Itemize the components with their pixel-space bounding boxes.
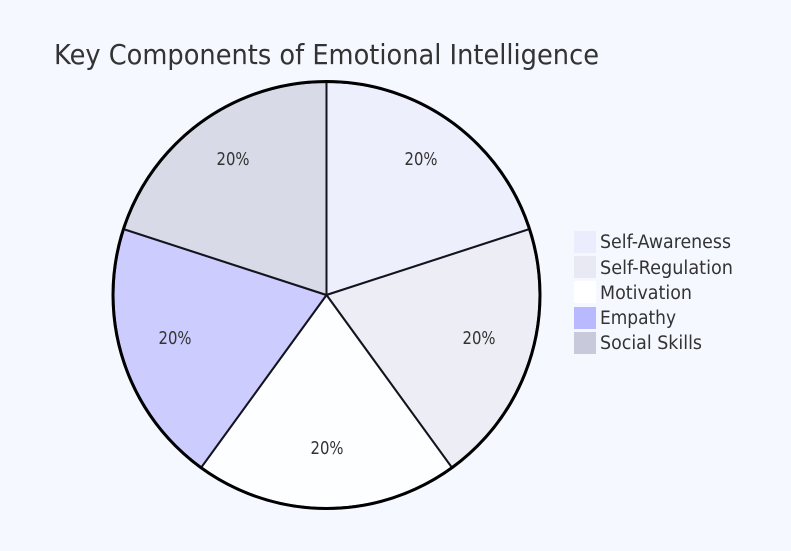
legend item: Empathy bbox=[574, 307, 676, 329]
slice: Self-Regulation bbox=[326, 229, 540, 467]
slice: Social Skills bbox=[124, 82, 327, 295]
label: 20% Self-Regulation: 20% bbox=[462, 328, 496, 349]
label: 20% Motivation: 20% bbox=[310, 438, 344, 459]
label: 20% Self-Awareness: 20% bbox=[404, 149, 438, 170]
title: Key Components of Emotional Intelligence bbox=[54, 38, 599, 71]
slice: Self-Awareness bbox=[326, 82, 529, 295]
legend item: Self-Regulation: Self-Regulation bbox=[600, 258, 733, 279]
legend bbox=[574, 231, 733, 354]
slice: Empathy bbox=[113, 229, 326, 467]
legend item: Motivation bbox=[574, 281, 692, 304]
legend item: Self-Awareness: Self-Awareness bbox=[600, 232, 731, 253]
legend item: Empathy: Empathy bbox=[600, 308, 676, 329]
pie outline bbox=[113, 82, 540, 508]
label: 20% Empathy: 20% bbox=[158, 328, 192, 349]
legend item: Social Skills: Social Skills bbox=[600, 333, 702, 354]
label: 20% Social Skills: 20% bbox=[216, 149, 250, 170]
legend item: Motivation: Motivation bbox=[600, 283, 692, 304]
pie chart bbox=[113, 82, 540, 508]
slice: Motivation bbox=[201, 295, 452, 508]
